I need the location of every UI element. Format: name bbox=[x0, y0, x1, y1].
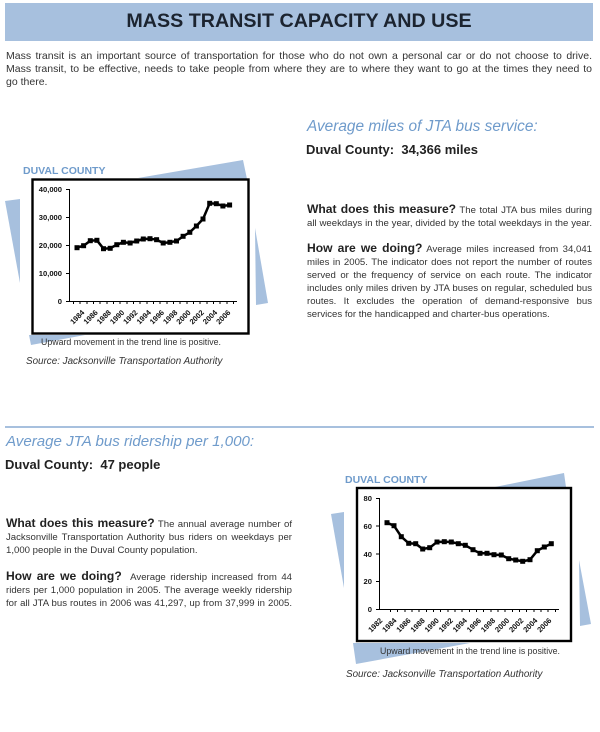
text: what does this measure, miles: all weekdays in the year, divided by the total weekdays in the year. bbox=[307, 218, 592, 229]
miles trend line bbox=[74, 201, 232, 251]
ridership chart x labels: 1990 bbox=[423, 616, 441, 634]
ridership chart x labels: 1982 bbox=[366, 616, 384, 634]
heading: bus miles: Average miles of JTA bus service: bbox=[307, 118, 538, 135]
text: what does this measure, miles bbox=[307, 202, 592, 229]
miles chart x labels: 1990 bbox=[108, 308, 126, 326]
ridership chart label: DUVAL COUNTY bbox=[345, 474, 427, 486]
miles chart x labels: 1988 bbox=[95, 308, 113, 326]
title banner: MASS TRANSIT CAPACITY AND USE bbox=[126, 10, 472, 32]
text: what does this measure, ridership: Jacksonville Transportation Authority bus riders on weekdays per bbox=[6, 532, 292, 543]
section divider bbox=[5, 426, 594, 428]
miles chart x labels bbox=[68, 307, 232, 326]
ridership chart x labels: 1984 bbox=[380, 615, 399, 634]
title banner bbox=[5, 3, 593, 41]
text: how are we doing, miles bbox=[307, 241, 592, 320]
miles chart y labels: 10,000 bbox=[39, 269, 62, 278]
miles chart x labels: 1986 bbox=[82, 308, 100, 326]
ridership chart y labels: 60 bbox=[364, 522, 372, 531]
miles chart y labels: 30,000 bbox=[39, 213, 62, 222]
text: how are we doing, miles: services for the handicapped and charter-bus operations. bbox=[307, 309, 550, 320]
miles chart y labels: 20,000 bbox=[39, 241, 62, 250]
text: how are we doing, ridership bbox=[6, 569, 292, 609]
miles chart label: DUVAL COUNTY bbox=[23, 165, 105, 177]
miles chart y labels bbox=[39, 185, 62, 306]
ridership chart x labels: 2000 bbox=[493, 616, 511, 634]
ridership chart x labels: 1996 bbox=[465, 616, 483, 634]
intro text: Mass transit, to be effective, needs to take people from where they are to where they want to go at the times they need to bbox=[6, 63, 592, 75]
ridership chart frame bbox=[357, 488, 571, 641]
miles chart x labels: 2000 bbox=[174, 308, 193, 326]
ridership chart axes bbox=[376, 498, 559, 612]
miles chart y labels: 0 bbox=[58, 297, 62, 306]
intro text: go there. bbox=[6, 76, 47, 88]
intro text bbox=[6, 50, 592, 88]
text: what does this measure, ridership: 1,000 people in the Duval County population. bbox=[6, 545, 197, 556]
ridership chart x labels: 2004 bbox=[521, 615, 540, 634]
intro text: Mass transit is an important source of transportation for those who do not own a personal car or do not choose to drive. bbox=[6, 50, 592, 62]
miles chart y labels: 40,000 bbox=[39, 185, 62, 194]
text: how are we doing, miles: How are we doing? Average miles increased from 34,041 bbox=[307, 241, 592, 255]
ridership chart x labels: 1998 bbox=[479, 616, 497, 634]
value: ridership: Duval County: 47 people bbox=[5, 457, 160, 472]
ridership chart x labels: 1992 bbox=[437, 616, 455, 634]
miles chart source: Source: Jacksonville Transportation Authority bbox=[26, 356, 223, 367]
decorative blue shapes behind ridership chart bbox=[331, 473, 591, 664]
miles chart x labels: 2002 bbox=[188, 308, 206, 326]
ridership chart x labels: 1988 bbox=[409, 616, 427, 634]
text: how are we doing, ridership: for all JTA bus routes in 2006 was 41,297, up from 37,999 in 2005. bbox=[6, 598, 292, 609]
text: how are we doing, ridership: How are we doing? Average ridership increased from 44 bbox=[6, 569, 292, 583]
ridership chart y labels: 0 bbox=[368, 605, 372, 614]
text: how are we doing, miles: routes. It excludes the operation of demand-responsive bus bbox=[307, 296, 592, 307]
miles chart x labels: 1994 bbox=[135, 307, 153, 326]
ridership trend line bbox=[384, 520, 554, 564]
miles chart x labels: 2004 bbox=[201, 307, 220, 326]
miles chart note: Upward movement in the trend line is positive. bbox=[41, 337, 221, 347]
decorative blue shapes behind miles chart bbox=[5, 160, 268, 345]
text: what does this measure, ridership: What does this measure? The annual average number of bbox=[6, 516, 292, 530]
miles chart x labels: 1996 bbox=[148, 308, 166, 326]
ridership chart x labels: 1994 bbox=[451, 615, 469, 634]
ridership chart source: Source: Jacksonville Transportation Authority bbox=[346, 669, 543, 680]
miles chart x labels: 1984 bbox=[68, 307, 87, 326]
ridership chart y labels: 20 bbox=[364, 577, 372, 586]
ridership chart note: Upward movement in the trend line is positive. bbox=[380, 646, 560, 656]
ridership chart y labels: 80 bbox=[364, 494, 372, 503]
ridership chart x labels bbox=[366, 615, 553, 634]
miles chart axes bbox=[66, 189, 237, 304]
miles chart x labels: 1992 bbox=[121, 308, 140, 326]
value: bus miles: Duval County: 34,366 miles bbox=[306, 142, 478, 157]
heading: ridership: Average JTA bus ridership per 1,000: bbox=[6, 433, 254, 450]
text: how are we doing, miles: miles in 2005. The indicator does not report the number of routes bbox=[307, 257, 592, 268]
miles chart x labels: 2006 bbox=[214, 308, 232, 326]
ridership chart x labels: 1986 bbox=[394, 616, 413, 634]
miles chart frame bbox=[32, 180, 248, 334]
ridership chart x labels: 2006 bbox=[535, 616, 553, 634]
text: what does this measure, miles: What does this measure? The total JTA bus miles during bbox=[307, 202, 592, 216]
ridership chart y labels: 40 bbox=[364, 550, 372, 559]
text: how are we doing, ridership: riders per 1,000 population in 2005. The average weekly ridership bbox=[6, 585, 292, 596]
text: what does this measure, ridership bbox=[6, 516, 292, 556]
miles chart x labels: 1998 bbox=[161, 308, 179, 326]
ridership chart y labels bbox=[364, 494, 372, 614]
text: how are we doing, miles: served or the frequency of service on each route. The indicator bbox=[307, 270, 592, 281]
ridership chart x labels: 2002 bbox=[507, 616, 525, 634]
text: how are we doing, miles: includes only miles driven by JTA buses on regular, scheduled bus bbox=[307, 283, 592, 294]
